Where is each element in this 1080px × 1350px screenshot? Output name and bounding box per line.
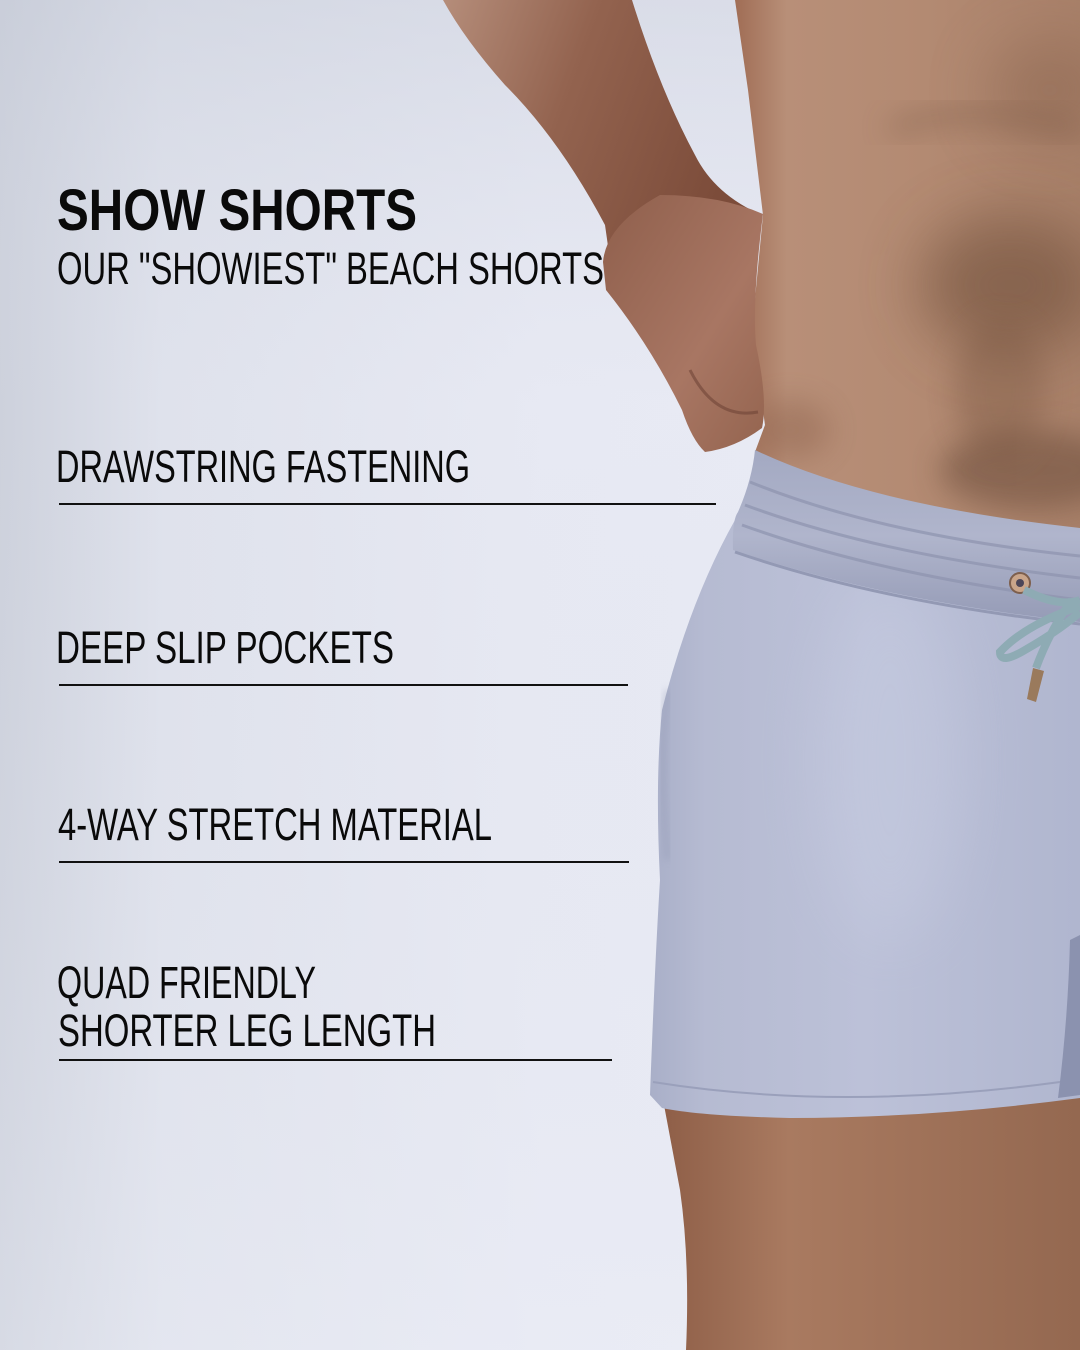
feature: quad friendly shorter leg length xyxy=(57,957,612,1061)
arm xyxy=(443,0,762,260)
photo: model wearing shorts xyxy=(443,0,1080,1350)
feature: drawstring fastening: DRAWSTRING FASTENING xyxy=(56,441,470,492)
torso xyxy=(735,0,1080,530)
drawstring xyxy=(1000,573,1080,702)
feature: quad friendly shorter leg length: QUAD FRIENDLY xyxy=(57,957,316,1008)
feature: quad friendly shorter leg length: SHORTER LEG LENGTH xyxy=(58,1005,436,1056)
title: SHOW SHORTS xyxy=(57,178,417,243)
leg xyxy=(664,1090,1080,1350)
waistband xyxy=(733,450,1080,624)
title xyxy=(57,178,604,294)
hand xyxy=(603,195,764,452)
feature: deep slip pockets: DEEP SLIP POCKETS xyxy=(56,622,394,673)
subtitle: OUR "SHOWIEST" BEACH SHORTS xyxy=(57,243,604,294)
shorts body xyxy=(650,520,1080,1118)
feature: 4-way stretch material: 4-WAY STRETCH MATERIAL xyxy=(58,799,492,850)
